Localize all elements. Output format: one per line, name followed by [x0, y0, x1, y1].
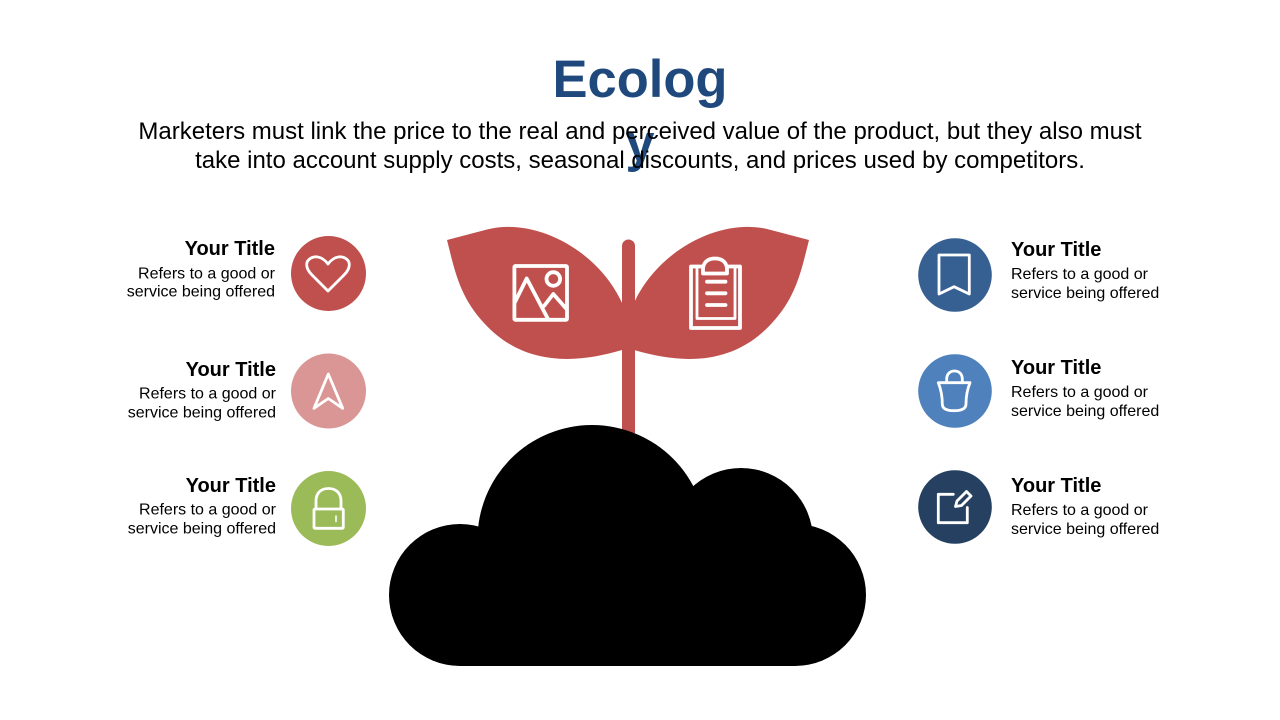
icon: bag	[938, 371, 970, 411]
left item 2: navigation	[128, 354, 366, 428]
label text 1: service being offered	[127, 284, 275, 300]
label text 2	[128, 359, 277, 422]
icon: heart	[307, 257, 349, 291]
icon: bookmark	[939, 255, 969, 294]
circle 1	[291, 236, 366, 311]
label text 1: Your Title	[185, 238, 275, 260]
label text 5: service being offered	[1011, 403, 1159, 420]
cloud	[389, 425, 866, 666]
label text 4	[1011, 239, 1159, 302]
circle 4	[918, 238, 992, 312]
circle 3	[291, 471, 366, 546]
label text 6	[1011, 475, 1159, 538]
title	[552, 50, 728, 173]
label text 6: Your Title	[1011, 475, 1101, 497]
subtitle text	[138, 118, 1142, 174]
right item 1: bookmark	[918, 238, 1159, 312]
left item 3: lock	[128, 471, 366, 546]
left leaf	[447, 227, 628, 359]
icon: navigation arrow	[314, 374, 343, 408]
label text 2: Refers to a good or	[139, 386, 277, 402]
label text 1	[127, 238, 276, 300]
label text 4: Refers to a good or	[1011, 266, 1149, 283]
icon: picture	[514, 266, 567, 320]
right item 2: bag	[918, 354, 1159, 428]
label text 5: Your Title	[1011, 357, 1101, 379]
label text 3: Your Title	[186, 475, 276, 497]
plant stem	[622, 240, 635, 433]
subtitle text: take into account supply costs, seasonal discounts, and prices used by competitors.	[195, 147, 1085, 174]
label text 4: service being offered	[1011, 285, 1159, 302]
icon: lock	[314, 488, 343, 528]
label text 2: service being offered	[128, 404, 276, 422]
left item 1: heart	[127, 236, 366, 311]
circle 2	[291, 354, 366, 428]
label text 3: service being offered	[128, 520, 276, 538]
right item 3: note	[918, 470, 1159, 544]
label text 5: Refers to a good or	[1011, 384, 1149, 401]
label text 6: service being offered	[1011, 521, 1159, 538]
label text 3: Refers to a good or	[139, 502, 277, 518]
subtitle text: Marketers must link the price to the real and perceived value of the product, but they also must	[138, 118, 1142, 145]
label text 6: Refers to a good or	[1011, 502, 1149, 519]
circle 6	[918, 470, 992, 544]
circle 5	[918, 354, 992, 428]
label text 3	[128, 475, 277, 538]
label text 2: Your Title	[186, 359, 276, 381]
label text 1: Refers to a good or	[138, 266, 276, 282]
icon: edit note	[938, 492, 971, 523]
icon: clipboard	[691, 258, 740, 328]
label text 4: Your Title	[1011, 239, 1101, 261]
title: y	[625, 114, 655, 173]
label text 5	[1011, 357, 1159, 420]
title: Ecolog	[552, 50, 728, 109]
right leaf	[628, 227, 809, 359]
